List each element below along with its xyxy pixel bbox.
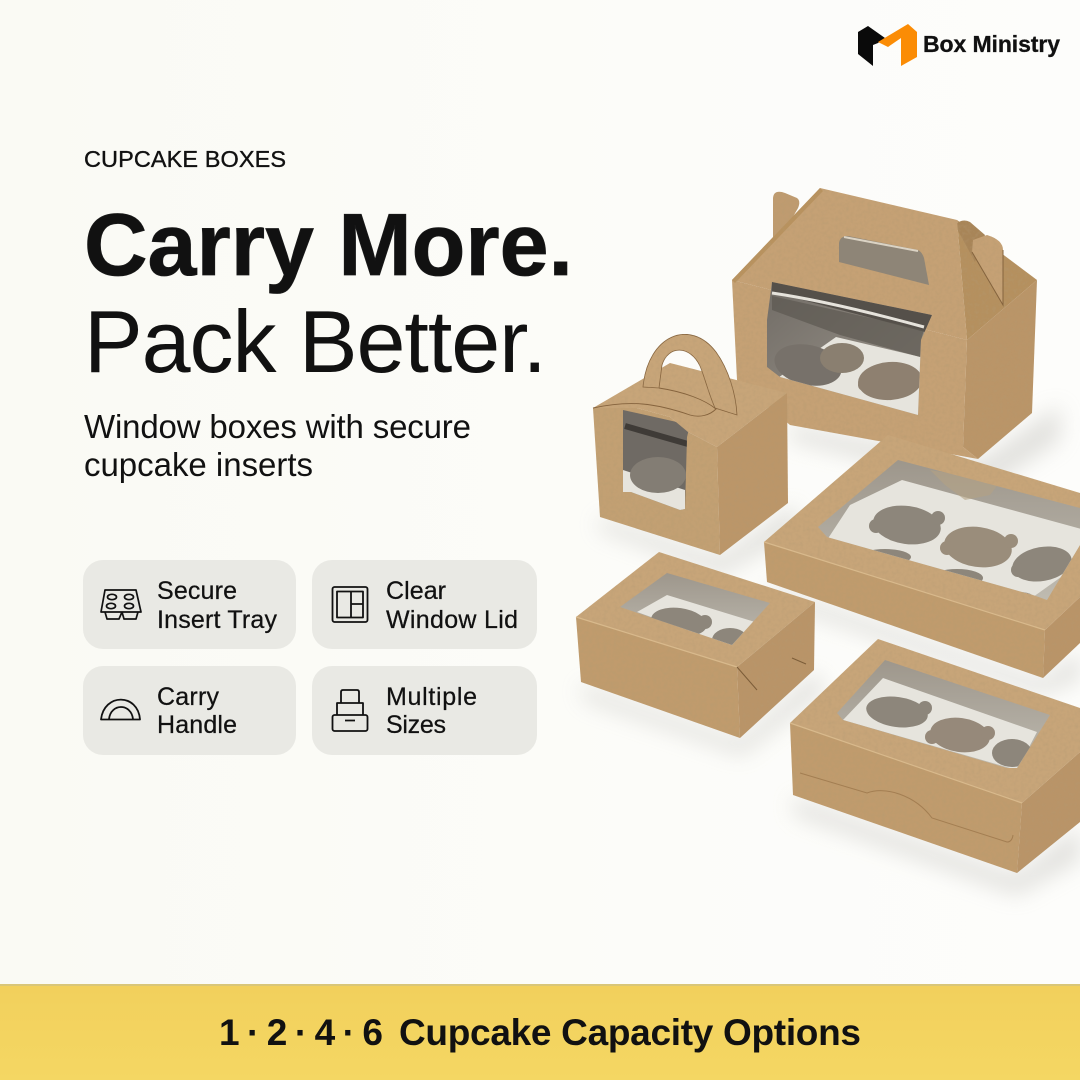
- single box lid and handle: [593, 334, 787, 447]
- front box window: [837, 660, 1050, 768]
- logo: Box Ministry: [858, 24, 1060, 66]
- subheading: cupcake inserts: [84, 446, 313, 483]
- six box window: [815, 455, 1080, 605]
- band text: Cupcake Capacity Options: [399, 1012, 861, 1053]
- icon: stacked boxes: [332, 690, 368, 731]
- product photo: kraft cupcake boxes: [576, 188, 1080, 895]
- box: two cupcake window box: [576, 552, 815, 738]
- feature card: Secure Insert Tray: [83, 560, 296, 649]
- logo: Box Ministry: Box Ministry: [923, 31, 1060, 57]
- feature card: Multiple Sizes: [312, 666, 537, 755]
- band text: 1 · 2 · 4 · 6: [219, 1012, 383, 1053]
- subheading: [84, 408, 471, 483]
- box: large front window box: [790, 639, 1080, 873]
- feature card: Clear Window Lid: Window Lid: [386, 606, 518, 634]
- yellow capacity band: [0, 984, 1080, 1080]
- gable handle cut-out: [839, 236, 929, 285]
- headline: [84, 195, 573, 391]
- headline: Carry More.: [84, 195, 573, 294]
- feature card: Carry Handle: Handle: [157, 711, 237, 739]
- icon: carry handle: [101, 700, 140, 720]
- feature card: Clear Window Lid: [312, 560, 537, 649]
- feature card: Secure Insert Tray: Insert Tray: [157, 606, 278, 634]
- shadows: [581, 405, 1080, 895]
- box: single cupcake box with handle: [593, 334, 788, 555]
- icon: insert tray: [101, 590, 141, 619]
- feature card: Multiple Sizes: Sizes: [386, 711, 446, 739]
- box: large gable box: [732, 188, 1037, 459]
- subheading: Window boxes with secure: [84, 408, 471, 445]
- feature card: Carry Handle: Carry: [157, 683, 220, 711]
- icon: window lid: [332, 587, 368, 622]
- box: six cupcake window box: [764, 435, 1080, 678]
- two box window: [620, 573, 770, 645]
- feature card: Secure Insert Tray: Secure: [157, 577, 237, 605]
- eyebrow: CUPCAKE BOXES: CUPCAKE BOXES: [84, 146, 286, 172]
- feature card: Carry Handle: [83, 666, 296, 755]
- headline: Pack Better.: [84, 292, 547, 391]
- feature card: Multiple Sizes: Multiple: [386, 683, 477, 711]
- gable window: [767, 282, 932, 415]
- feature card: Clear Window Lid: Clear: [386, 577, 446, 605]
- single box window: [623, 410, 688, 510]
